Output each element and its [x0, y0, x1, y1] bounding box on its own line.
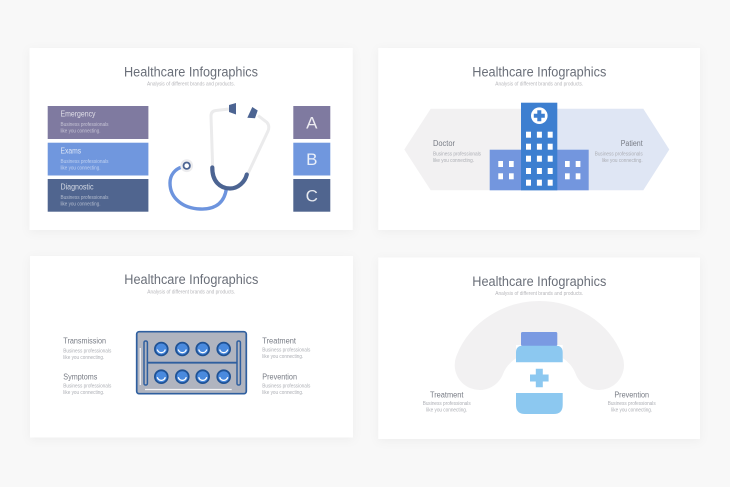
- subtitle: Analysis of different brands and products.: [147, 82, 235, 88]
- tile: A: A: [306, 114, 318, 132]
- text: Doctor: like you connecting.: [433, 158, 474, 164]
- subtitle: Analysis of different brands and products.: [495, 291, 583, 297]
- text: Symptoms: Symptoms: [63, 372, 97, 382]
- text: Treatment: Treatment: [430, 390, 464, 399]
- card: Exams: like you connecting.: [60, 166, 100, 172]
- text: Doctor: Business professionals: [433, 152, 481, 158]
- text: Symptoms: Business professionals: [63, 384, 112, 390]
- text: Treatment: [423, 390, 471, 414]
- text: Patient: [595, 139, 643, 164]
- text: Prevention: like you connecting.: [611, 408, 652, 414]
- text: Treatment: [262, 336, 311, 360]
- shape: right arrow: [556, 109, 669, 190]
- title: Healthcare Infographics: [472, 274, 607, 289]
- card: Emergency: [48, 106, 148, 139]
- shape: left arrow: [404, 109, 522, 190]
- text: Prevention: Business professionals: [608, 401, 656, 407]
- shape: arch: [480, 326, 599, 365]
- text: Treatment: Treatment: [262, 336, 297, 346]
- subtitle: Analysis of different brands and products.: [495, 82, 583, 88]
- text: Transmission: Business professionals: [63, 348, 112, 354]
- text: Treatment: Business professionals: [262, 348, 311, 354]
- text: Doctor: [433, 139, 481, 164]
- card: Emergency: like you connecting.: [60, 128, 100, 134]
- subtitle: Analysis of different brands and products.: [147, 289, 235, 295]
- text: Symptoms: like you connecting.: [63, 390, 104, 396]
- icon: stethoscope: [170, 103, 269, 209]
- card: Diagnostic: Business professionals: [60, 195, 109, 201]
- panel: pill blister slide: [30, 256, 353, 438]
- tile: C: C: [306, 186, 318, 206]
- card: Diagnostic: like you connecting.: [60, 202, 100, 208]
- panel: hospital slide: [378, 48, 700, 230]
- title: Healthcare Infographics: [124, 64, 258, 80]
- icon: medicine bottle: [516, 332, 563, 414]
- panel: medicine bottle slide: [378, 258, 700, 439]
- text: Treatment: like you connecting.: [426, 408, 467, 414]
- icon: hospital: [490, 103, 589, 190]
- tile: A: [293, 106, 330, 139]
- text: Patient: Business professionals: [595, 152, 643, 158]
- card: Diagnostic: Diagnostic: [60, 182, 94, 192]
- text: Prevention: Business professionals: [262, 384, 311, 390]
- card: Emergency: Emergency: [60, 110, 96, 118]
- text: Patient: like you connecting.: [602, 158, 643, 164]
- tile: B: [293, 143, 330, 176]
- panel: stethoscope slide: [30, 48, 353, 230]
- text: Treatment: Business professionals: [423, 401, 471, 407]
- text: Prevention: Prevention: [614, 390, 649, 399]
- text: Transmission: like you connecting.: [63, 355, 104, 361]
- title: Healthcare Infographics: [124, 272, 259, 287]
- text: Prevention: Prevention: [262, 372, 297, 382]
- tile: C: [293, 179, 330, 212]
- text: Prevention: like you connecting.: [262, 390, 303, 396]
- text: Patient: Patient: [621, 139, 643, 148]
- card: Diagnostic: [48, 179, 148, 212]
- icon: blister pack: [137, 332, 246, 394]
- text: Prevention: [262, 372, 311, 396]
- card: Exams: Business professionals: [60, 159, 109, 165]
- text: Symptoms: [63, 372, 112, 396]
- text: Doctor: Doctor: [433, 139, 455, 148]
- tile: B: B: [306, 150, 317, 169]
- card: Exams: Exams: [60, 146, 81, 156]
- card: Exams: [48, 143, 148, 176]
- text: Transmission: Transmission: [63, 336, 106, 346]
- title: Healthcare Infographics: [472, 64, 607, 80]
- text: Transmission: [63, 336, 112, 361]
- text: Prevention: [608, 390, 656, 414]
- card: Emergency: Business professionals: [60, 122, 109, 128]
- text: Treatment: like you connecting.: [262, 354, 303, 360]
